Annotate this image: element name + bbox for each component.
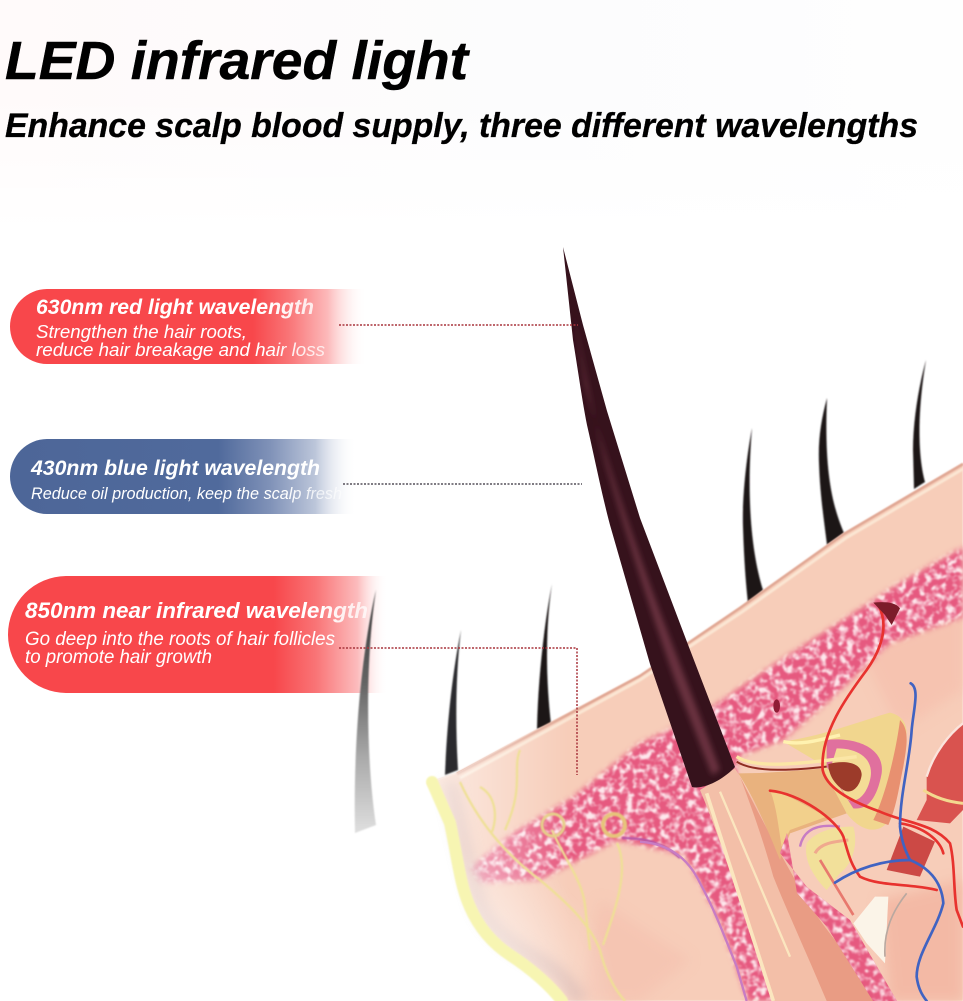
panel: 630nm red light: 630nm red light wavelength	[36, 296, 314, 319]
sebaceous gland	[783, 713, 907, 830]
dermis tone patches	[580, 610, 963, 1001]
skin edge shadow	[449, 782, 580, 1001]
white gap	[853, 897, 888, 963]
skin base	[427, 463, 963, 1001]
follicle pink speckled layer	[780, 833, 897, 1001]
panel: 430nm blue light: Reduce oil production, keep the scalp fresh	[31, 485, 342, 503]
lower gland lobe	[806, 827, 855, 890]
skin cross-section	[425, 463, 963, 1001]
panel: 430nm blue light	[10, 439, 357, 514]
nerves and glands	[460, 750, 680, 1001]
tan region beside follicle	[738, 768, 847, 860]
panel: 630nm red light: reduce hair breakage and hair loss	[36, 339, 325, 360]
yellow edge strip	[432, 782, 562, 1001]
arteries	[770, 605, 963, 927]
panel: 850nm near infrared	[8, 576, 388, 693]
title: LED infrared light	[5, 31, 470, 91]
panel: 430nm blue light: 430nm blue light wavelength	[30, 456, 320, 480]
hair follicle and vessels	[640, 602, 963, 1001]
epidermis highlight	[460, 469, 963, 778]
small hairs	[355, 360, 926, 833]
left fade overlays	[438, 723, 597, 1001]
subtitle: Enhance scalp blood supply, three different wavelengths	[5, 107, 918, 145]
panel: 850nm near infrared: 850nm near infrared wavelength	[25, 598, 368, 623]
panel: 850nm near infrared: Go deep into the roots of hair follicles	[25, 629, 335, 650]
follicle sheath	[700, 768, 897, 1001]
follicle notch and dark spots	[873, 602, 900, 625]
muscle	[917, 723, 963, 823]
panel: 630nm red light: Strengthen the hair roots,	[36, 321, 247, 342]
follicle purple sheath line	[640, 842, 747, 1001]
hair highlight	[580, 354, 722, 776]
dotted leader lines	[339, 325, 582, 775]
panel: 850nm near infrared: to promote hair growth	[25, 647, 212, 668]
pink dermis band	[470, 544, 963, 1001]
epidermis edge	[457, 464, 963, 774]
panel: 630nm red light	[10, 289, 367, 364]
main hair	[563, 247, 735, 788]
veins	[835, 683, 943, 1001]
